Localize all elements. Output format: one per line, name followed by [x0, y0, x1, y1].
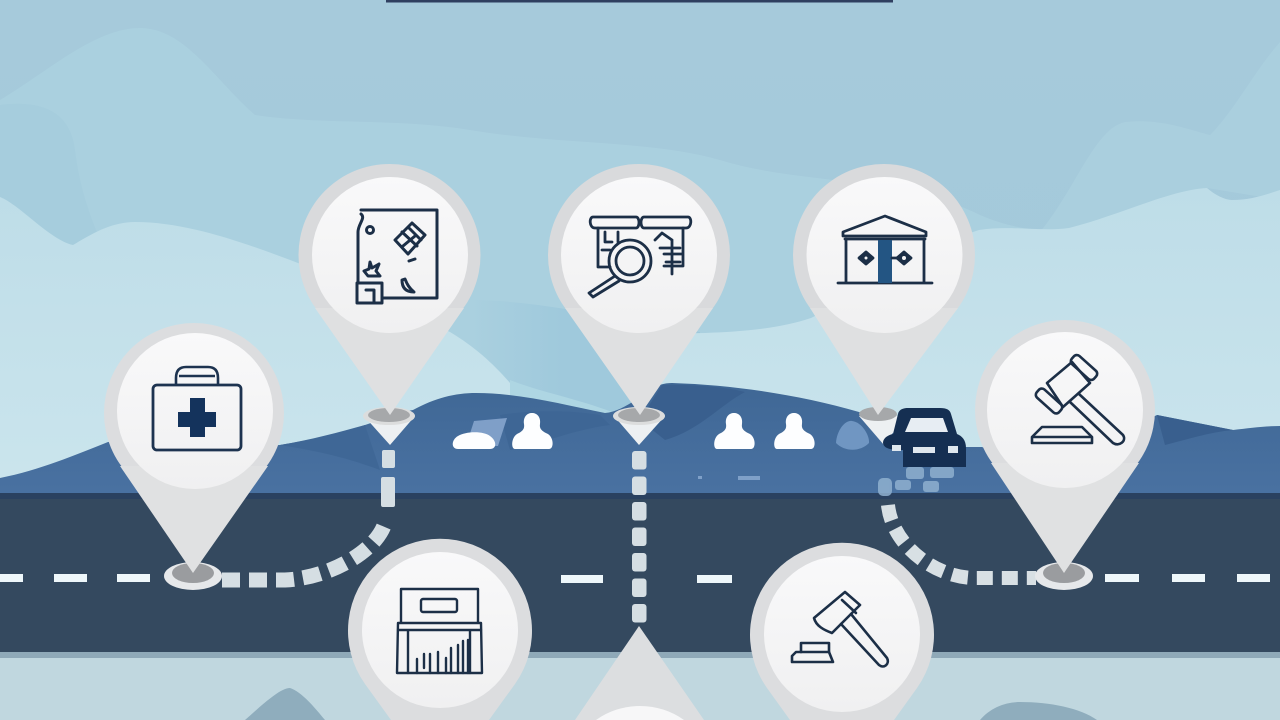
- icon: car: [878, 408, 966, 496]
- dashed route: centre: [632, 451, 646, 622]
- icon: medical kit: [153, 367, 241, 450]
- pin base: map: [363, 407, 415, 445]
- pin: medical kit: [104, 323, 284, 590]
- pin: map: [298, 164, 480, 445]
- icon: map with route marks: [357, 210, 437, 303]
- top title bar edge: [386, 0, 893, 2]
- icon: magnifier over buildings: [589, 217, 691, 297]
- icon: hammer and block: [792, 592, 888, 666]
- icon: garage house: [838, 216, 932, 283]
- pin: bottom right gavel: [750, 543, 934, 720]
- foreground ground strip: [0, 652, 1280, 720]
- pin: house: [793, 164, 975, 445]
- pin: bottom centre: [575, 626, 704, 720]
- distant clouds: [0, 28, 1280, 430]
- pin base: magnifier: [613, 407, 665, 445]
- light hills: [0, 188, 1280, 500]
- road: [0, 493, 1280, 653]
- pin base: medical kit: [164, 562, 222, 590]
- road centre dashes: [0, 574, 1270, 583]
- pin: bottom left document shredder: [348, 539, 532, 720]
- pin: gavel right: [975, 320, 1155, 590]
- pin: magnifier: [548, 164, 730, 445]
- dashed route: right: [888, 505, 1036, 578]
- dashed route: left: [222, 450, 395, 580]
- icon: shredder chart: [397, 589, 482, 673]
- icon: gavel: [1032, 353, 1124, 444]
- car exhaust puffs: [878, 467, 954, 496]
- dark blue mountains: [0, 383, 1280, 500]
- pin base: gavel right: [1035, 562, 1093, 590]
- clouds on hills: [453, 413, 869, 450]
- pin base: house: [859, 407, 905, 445]
- faint marks on hillside: [698, 476, 760, 480]
